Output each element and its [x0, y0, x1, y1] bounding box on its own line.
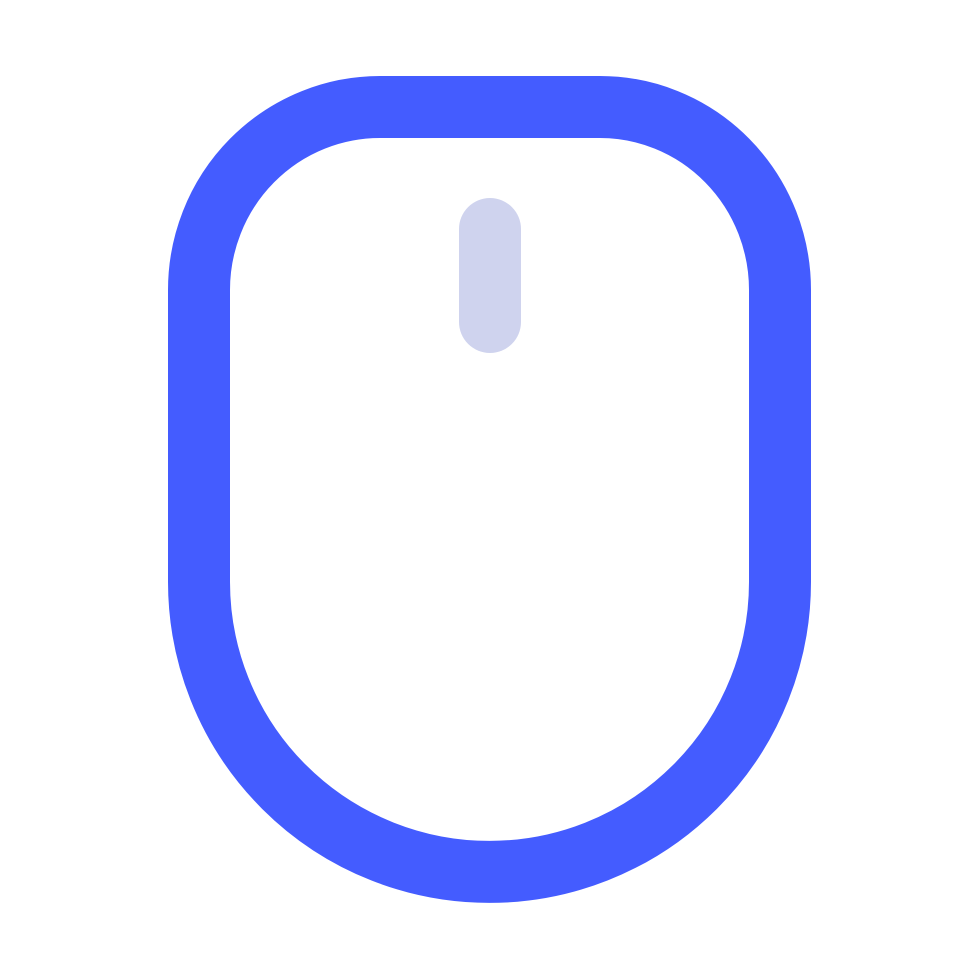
scroll wheel: [459, 198, 521, 353]
mouse body outline: [199, 107, 780, 872]
